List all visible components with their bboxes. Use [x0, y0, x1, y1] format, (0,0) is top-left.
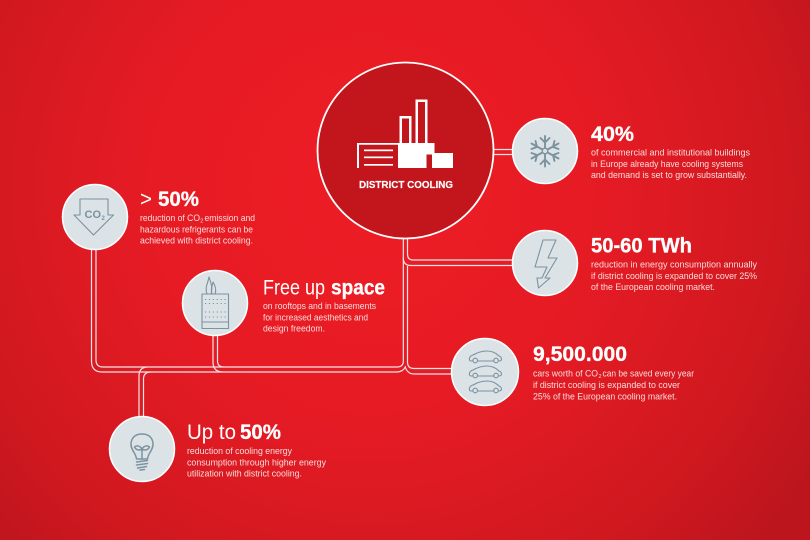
icon: snowflake — [532, 136, 558, 166]
icon: factory — [357, 100, 453, 168]
main circle: district cooling — [318, 62, 494, 238]
text block: more than 50%: emission and — [204, 212, 255, 223]
text block: 40%: in Europe already have cooling systems — [591, 158, 743, 169]
text block: 9,500.000 — [533, 343, 694, 402]
icon: light bulb with sprout — [131, 434, 153, 470]
text block: more than 50% — [140, 188, 255, 246]
lightning node — [512, 230, 578, 296]
text block: 50-60 TWh: if district cooling is expanded to cover 25% — [591, 270, 757, 281]
text block: 9,500.000: 9,500.000 — [533, 343, 627, 366]
CO2 node — [62, 184, 128, 250]
text block: free up space: on rooftops and in basements — [263, 300, 376, 311]
icon: cooling unit with flames — [202, 277, 228, 328]
cars node — [452, 338, 518, 406]
text block: 9,500.000: can be saved every year — [602, 368, 694, 378]
text block: 40%: and demand is set to grow substantially. — [591, 169, 747, 180]
text block: up to 50%: utilization with district cooling. — [187, 468, 302, 478]
text block: 50-60 TWh: 50-60 TWh — [591, 234, 692, 258]
text block: free up space: space — [331, 276, 385, 300]
bulb node — [110, 416, 174, 482]
text block: 50-60 TWh — [591, 234, 757, 292]
icon: CO2 down arrow: CO — [84, 209, 101, 221]
text block: 40%: 40% — [591, 123, 634, 146]
text block: 50-60 TWh: of the European cooling market. — [591, 281, 715, 292]
text block: free up space — [263, 276, 385, 334]
space node — [182, 270, 248, 336]
text block: more than 50%: 2 — [200, 218, 203, 224]
text block: more than 50%: 50% — [158, 188, 199, 211]
text block: more than 50%: achieved with district cooling. — [140, 234, 253, 246]
text block: more than 50%: reduction of CO — [140, 212, 200, 223]
snowflake node — [512, 118, 578, 184]
text block: 9,500.000: if district cooling is expanded to cover — [533, 379, 680, 390]
text block: up to 50%: consumption through higher energy — [187, 456, 326, 468]
text block: up to 50%: reduction of cooling energy — [187, 445, 292, 456]
text block: 40%: of commercial and institutional buildings — [591, 146, 750, 158]
icon: CO2 down arrow: 2 — [102, 216, 106, 222]
text block: more than 50%: > — [140, 188, 152, 211]
icon: CO2 down arrow — [74, 199, 114, 235]
text block: up to 50% — [187, 421, 326, 478]
connecting pipes — [92, 150, 513, 417]
text block: up to 50%: Up to — [187, 421, 236, 444]
text block: more than 50%: hazardous refrigerants can be — [140, 224, 253, 234]
text block: 40% — [591, 123, 750, 180]
text block: free up space: Free up — [263, 276, 325, 300]
text block: 9,500.000: 25% of the European cooling market. — [533, 390, 677, 402]
label: district cooling: DISTRICT COOLING — [359, 179, 453, 191]
text block: 9,500.000: 2 — [598, 374, 602, 380]
icon: three cars — [469, 351, 502, 393]
text block: free up space: design freedom. — [263, 322, 325, 334]
text block: free up space: for increased aesthetics and — [263, 312, 368, 322]
text block: 50-60 TWh: reduction in energy consumption annually — [591, 258, 757, 270]
text block: up to 50%: 50% — [240, 421, 281, 444]
text block: 9,500.000: cars worth of CO — [533, 368, 598, 378]
icon: lightning bolt — [535, 240, 557, 288]
